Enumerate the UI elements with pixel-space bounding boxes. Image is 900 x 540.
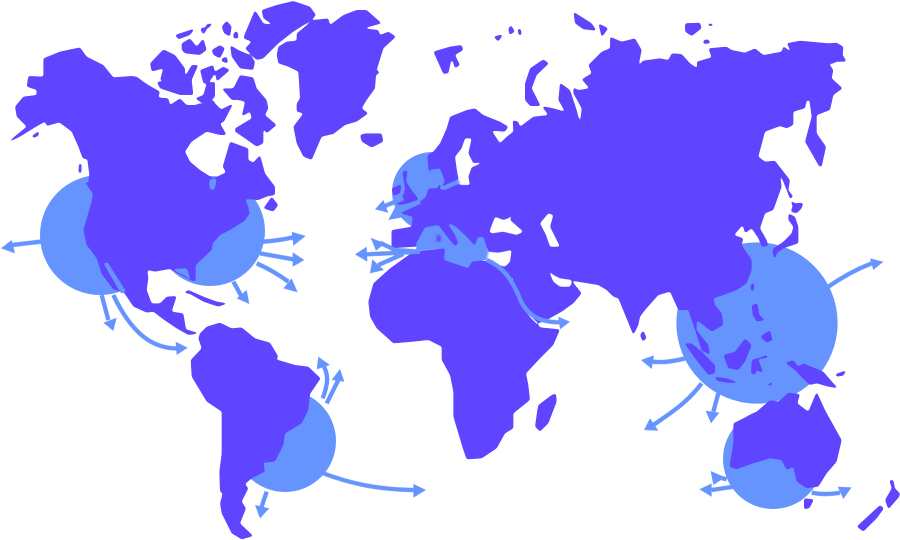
Great Britain and Ireland — [392, 170, 419, 205]
arrow: Gibraltar northwest — [371, 238, 420, 252]
arrow: Pacific west — [1, 240, 41, 253]
circle: North America west — [40, 175, 160, 295]
arrow: Tasman Sea east — [812, 487, 852, 499]
arrow: Caribbean — [233, 282, 249, 304]
arrow: Pacific to Central America — [113, 295, 188, 355]
New Zealand — [857, 480, 900, 532]
Japan — [773, 200, 803, 260]
arrow: Gibraltar west — [355, 247, 420, 262]
Iceland — [360, 133, 383, 148]
Red Sea white line — [512, 278, 537, 323]
circle: South Atlantic — [234, 390, 336, 492]
arrow: Suez to Arabian Sea — [487, 260, 570, 329]
Australia — [729, 392, 842, 488]
arrow: Atlantic southeast — [257, 263, 298, 292]
arrow: South Atlantic east — [323, 473, 426, 498]
Skagerrak inlet — [428, 168, 445, 187]
Newfoundland — [263, 197, 278, 212]
Baltic south inlet — [439, 179, 460, 190]
Vancouver and Alaskan islands — [32, 131, 94, 195]
arrow: Atlantic east 2 — [260, 252, 304, 267]
arrows — [1, 198, 883, 518]
Svalbard — [433, 45, 463, 74]
circle: Australia south — [723, 409, 823, 509]
Canadian Arctic islands — [150, 1, 316, 147]
arrow: South Atlantic north 1 — [317, 357, 330, 398]
Madagascar — [535, 393, 557, 432]
Africa — [368, 248, 560, 459]
arrow: South Atlantic north 2 — [327, 369, 344, 403]
Arctic Russian islands — [493, 12, 715, 106]
Eurasia — [392, 37, 847, 355]
circle: North America east — [155, 176, 265, 286]
circle: North Sea — [392, 152, 472, 232]
Baltic Sea — [455, 138, 485, 185]
North America — [5, 47, 275, 335]
Gulf of Mexico inlet — [172, 268, 192, 282]
Gulf of California — [103, 262, 126, 294]
arrow: Southern Ocean northwest — [711, 471, 727, 485]
Caspian Sea — [540, 213, 560, 247]
arrow: Gibraltar southwest — [370, 254, 403, 273]
Eastern Mediterranean white wedge — [487, 250, 512, 267]
Black Sea — [489, 213, 523, 235]
arrow: Southern Ocean west — [699, 483, 733, 497]
highlight circles — [40, 152, 838, 509]
arrow: Pacific northeast — [828, 258, 883, 287]
inland seas — [103, 138, 572, 294]
Sardinia — [437, 235, 441, 242]
arrow: South Atlantic south — [255, 492, 269, 518]
Cuba and Caribbean — [183, 290, 228, 307]
arrow: North Sea west — [375, 198, 403, 213]
arrow: Indian Ocean southwest — [644, 383, 702, 431]
James Bay — [209, 178, 217, 191]
arrow: Atlantic east 1 — [263, 232, 306, 246]
arrow: Indian Ocean west — [641, 355, 685, 369]
Tasmania — [804, 498, 814, 509]
Southeast Asian islands — [640, 281, 847, 388]
Gulf of St Lawrence — [243, 199, 262, 222]
circle: Southeast Asia — [676, 242, 838, 404]
Persian Gulf — [548, 270, 572, 287]
South America — [191, 323, 321, 539]
Greenland — [277, 10, 396, 160]
Mediterranean Sea — [393, 223, 488, 268]
arrow: Pacific south — [102, 295, 117, 331]
arrow: North Sea southwest — [388, 202, 420, 220]
arrow: Indian Ocean south — [706, 393, 719, 423]
